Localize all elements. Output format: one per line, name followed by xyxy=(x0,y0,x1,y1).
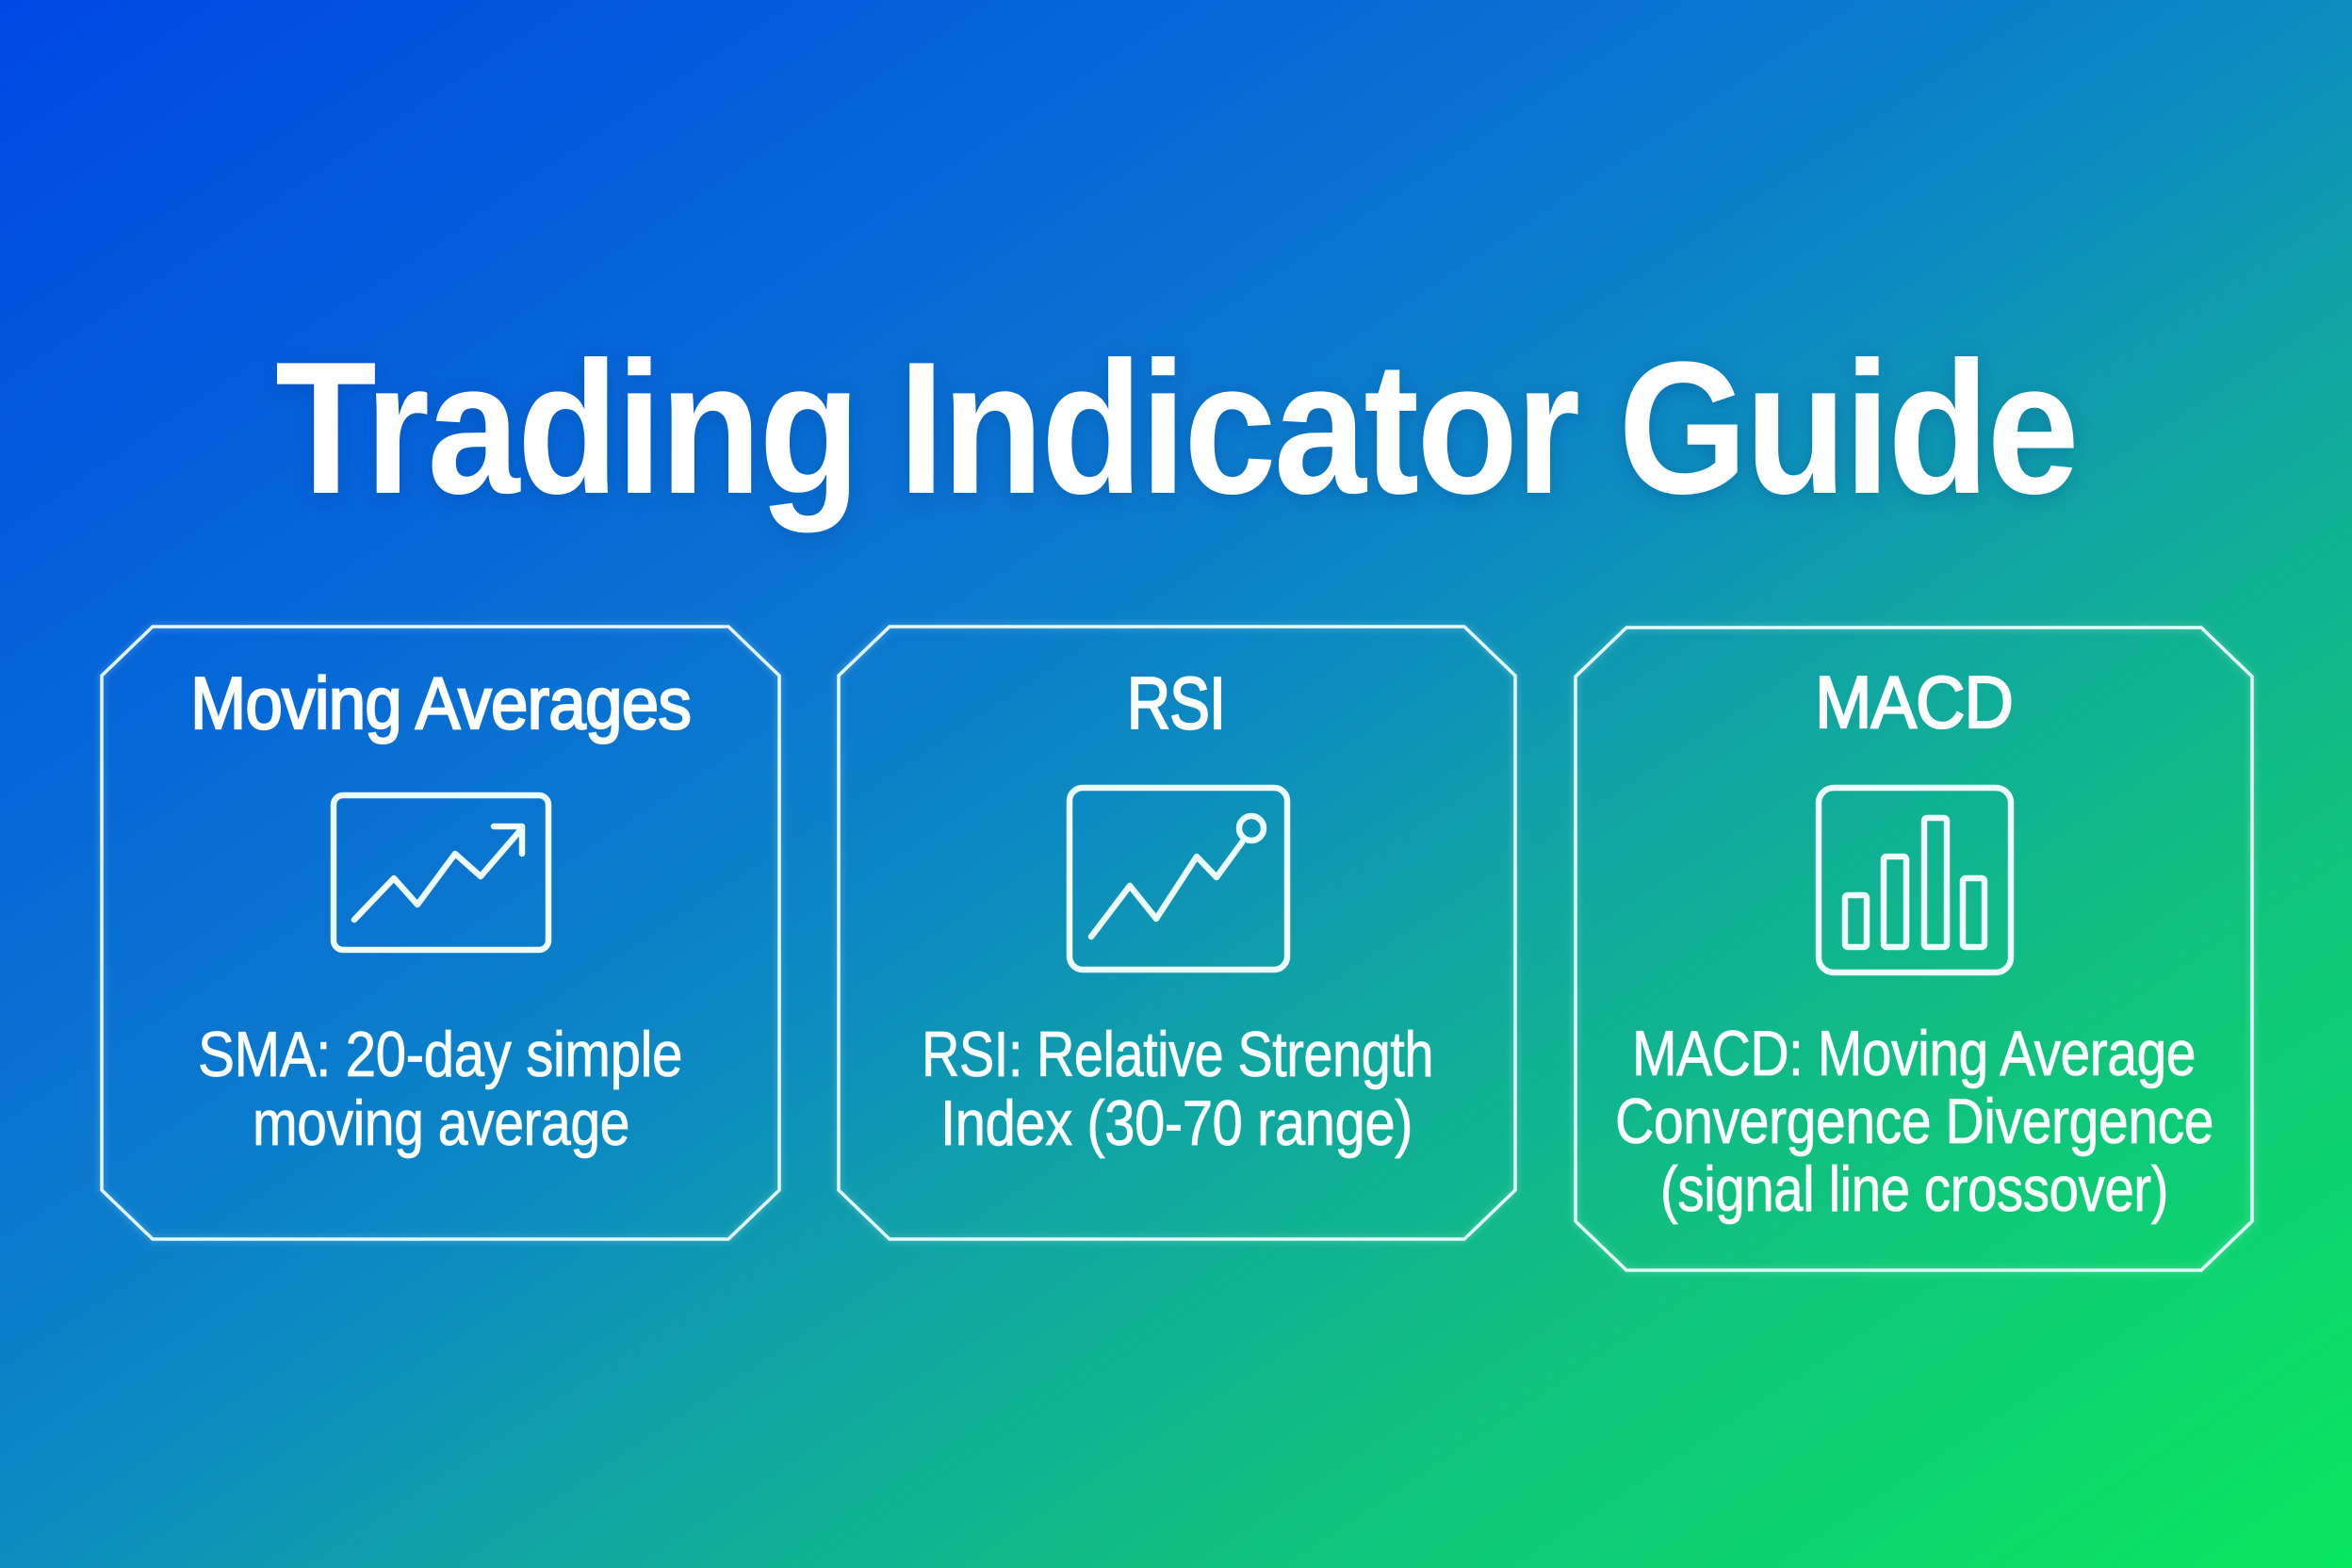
heading: RSI: RSI xyxy=(1127,662,1225,744)
description: RSI: Index (30-70 range) xyxy=(940,1087,1413,1159)
panel frame xyxy=(102,627,779,1239)
description: MACD xyxy=(1615,1018,2213,1225)
icon: bar chart xyxy=(1819,788,2011,972)
heading: Moving Averages: Moving Averages xyxy=(190,662,691,744)
description: SMA xyxy=(198,1019,682,1159)
panel: Moving Averages xyxy=(102,627,779,1239)
title: Trading Indicator Guide xyxy=(275,323,2077,533)
description: RSI xyxy=(922,1019,1433,1159)
icon: line chart with circle marker xyxy=(1070,788,1287,970)
heading: MACD: MACD xyxy=(1815,661,2013,743)
description: MACD: Convergence Divergence xyxy=(1615,1086,2213,1157)
icon: line chart with arrow xyxy=(334,795,548,950)
panel: MACD xyxy=(1576,628,2252,1270)
panel frame xyxy=(839,627,1515,1239)
description: SMA: SMA: 20-day simple xyxy=(198,1019,682,1090)
description: SMA: moving average xyxy=(253,1087,629,1159)
panel: RSI xyxy=(839,627,1515,1239)
description: MACD: MACD: Moving Average xyxy=(1632,1018,2196,1089)
panel frame xyxy=(1576,628,2252,1270)
description: RSI: RSI: Relative Strength xyxy=(922,1019,1433,1090)
description: MACD: (signal line crossover) xyxy=(1660,1153,2168,1225)
